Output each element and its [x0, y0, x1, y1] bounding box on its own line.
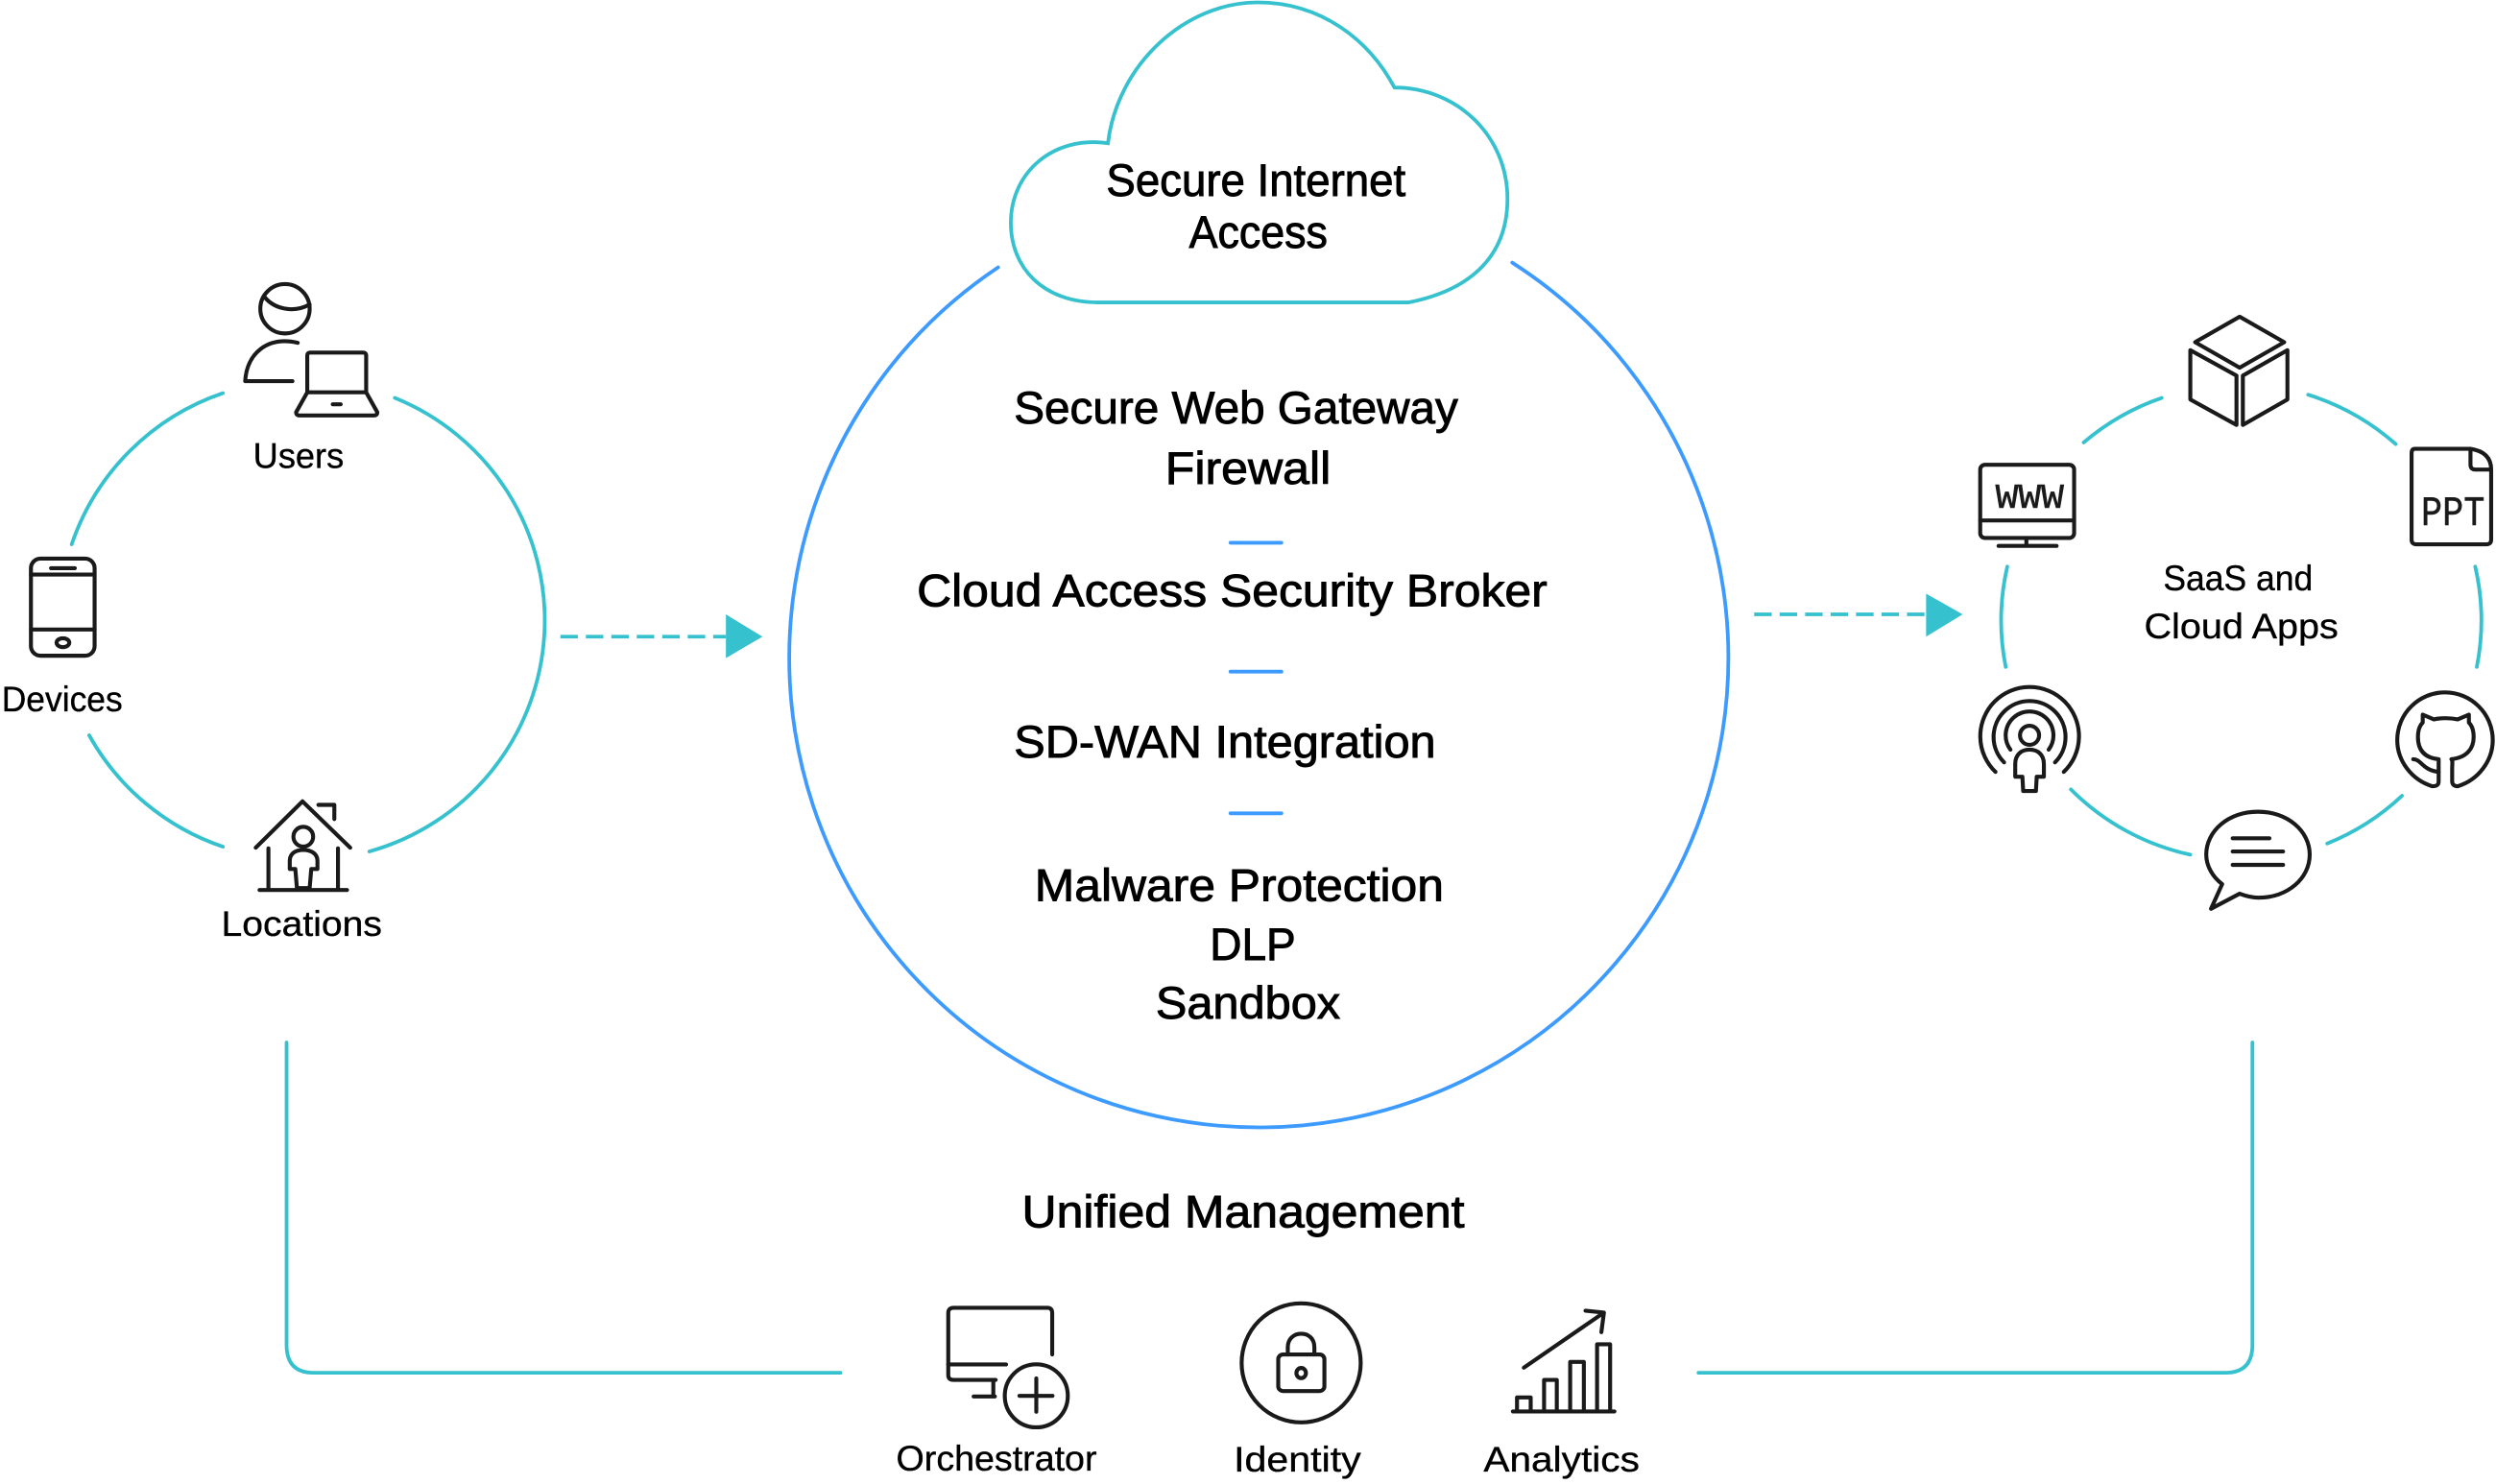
label: SD-WAN Integration: SD-WAN Integration: [1014, 717, 1436, 768]
label: Malware Protection: Malware Protection: [1035, 860, 1444, 911]
cloud: Secure Internet Access: [1011, 2, 1507, 302]
heading: Unified Management: Unified Management: [1022, 1186, 1464, 1237]
blue circle arc: [789, 263, 1728, 1128]
icon: analytics chart: [1513, 1310, 1615, 1411]
label: SaaS and: SaaS and: [2163, 558, 2313, 598]
icon: PPT file: [2412, 449, 2491, 544]
icon: house with person: [255, 802, 350, 890]
label: Locations: Locations: [222, 903, 382, 944]
icon: smartphone: [31, 559, 95, 656]
label: Analytics: Analytics: [1483, 1439, 1640, 1479]
label: Secure Web Gateway: Secure Web Gateway: [1014, 383, 1458, 434]
label: DLP: DLP: [1210, 920, 1296, 970]
icon: PPT file: PPT: [2421, 491, 2484, 538]
icon: WWW monitor: WWW: [1996, 479, 2064, 518]
icon: GitHub: [2397, 692, 2493, 786]
icon: user with laptop: [245, 284, 377, 416]
label: Users: Users: [253, 435, 344, 475]
label: Devices: Devices: [2, 679, 123, 719]
arrow: cloud to apps: [1754, 593, 1962, 636]
ring arcs: apps: [2002, 395, 2482, 854]
panel: SaaS and cloud apps ring: [1980, 317, 2493, 909]
label: Orchestrator: Orchestrator: [897, 1438, 1096, 1478]
panel: secure services circle: [789, 263, 1728, 1128]
icon: cube: [2191, 317, 2288, 425]
label: Firewall: Firewall: [1165, 443, 1331, 494]
ring arcs: endpoints: [72, 394, 544, 851]
label: Identity: Identity: [1234, 1439, 1361, 1479]
icon: identity lock: [1241, 1304, 1360, 1423]
label: Cloud Access Security Broker: Cloud Access Security Broker: [917, 566, 1548, 617]
label: Sandbox: Sandbox: [1156, 978, 1341, 1029]
arrow: endpoints to cloud: [561, 614, 762, 658]
label: Secure Internet: Secure Internet: [1106, 156, 1405, 206]
icon: podcast: [1980, 687, 2079, 791]
icon: orchestrator monitor: [948, 1307, 1068, 1427]
connector: right management bracket: [1698, 1042, 2252, 1373]
panel: endpoints ring: [2, 284, 544, 944]
connector: left management bracket: [287, 1042, 841, 1373]
label: Access: Access: [1189, 207, 1328, 258]
icon: chat bubble: [2206, 812, 2310, 909]
label: Cloud Apps: Cloud Apps: [2145, 606, 2339, 646]
icon: WWW monitor: [1980, 465, 2075, 546]
panel: management tools: [897, 1304, 1640, 1479]
